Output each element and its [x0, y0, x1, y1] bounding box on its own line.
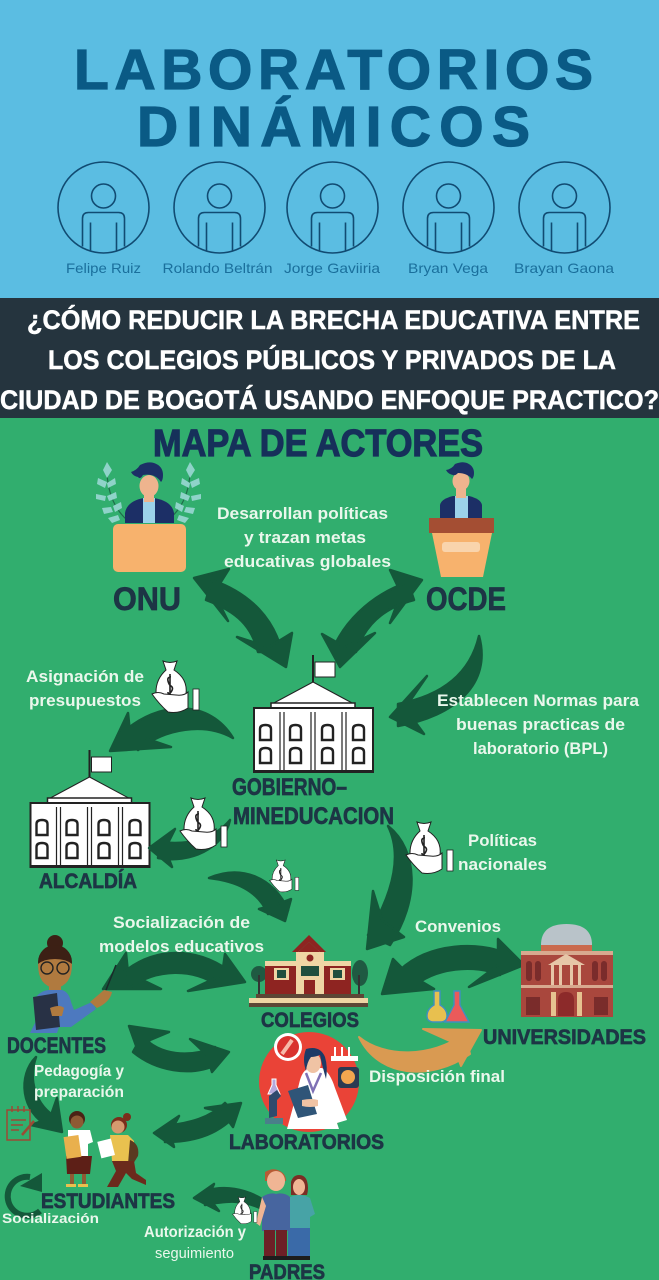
- text: establecen normas: [437, 691, 640, 758]
- member: Brayan Gaona: Brayan Gaona: [514, 260, 614, 276]
- label: OCDE: OCDE: [426, 581, 506, 617]
- text: autorización y seguimiento: seguimiento: [155, 1245, 234, 1262]
- arrow: alcaldía to colegios: [209, 873, 291, 921]
- text: convenios: Convenios: [415, 917, 501, 936]
- member: Jorge Gaviiria: [284, 162, 380, 276]
- text: pedagogía y preparación: preparación: [34, 1084, 124, 1101]
- icon: laboratorio scientist: [259, 1032, 359, 1132]
- icon: building gobierno: [253, 655, 374, 773]
- icon: money bag 5: [233, 1197, 257, 1224]
- label: gobierno mineducacion: [232, 774, 394, 830]
- text: pedagogía y preparación: [34, 1063, 124, 1101]
- arrow: colegios and universidades: [382, 939, 524, 994]
- label: gobierno mineducacion: GOBIERNO–: [232, 774, 347, 801]
- title: DINÁMICOS: [137, 95, 530, 159]
- text: desarrollan políticas: y trazan metas: [244, 528, 366, 547]
- member: Bryan Vega: Bryan Vega: [408, 260, 488, 276]
- text: políticas nacionales: nacionales: [458, 855, 547, 874]
- text: desarrollan políticas: [217, 504, 391, 571]
- text: autorización y seguimiento: Autorización y: [144, 1224, 246, 1241]
- arrow: docentes and colegios: [103, 953, 245, 991]
- member: Bryan Vega: [403, 162, 494, 276]
- icon: money bag 1: [152, 661, 199, 712]
- icon: money bag 3: [270, 860, 299, 892]
- panel: actor map background: [0, 418, 659, 1280]
- question text: [0, 304, 659, 415]
- text: establecen normas: laboratorio (BPL): [473, 739, 608, 758]
- label: universidades: UNIVERSIDADES: [483, 1026, 646, 1049]
- text: desarrollan políticas: Desarrollan políticas: [217, 504, 388, 523]
- text: socialización de modelos: modelos educativos: [99, 937, 264, 956]
- text: asignación de presupuestos: presupuestos: [29, 691, 141, 710]
- member: Brayan Gaona: [514, 162, 614, 276]
- text: socialización: Socialización: [2, 1210, 99, 1226]
- member: Rolando Beltrán: [162, 162, 272, 276]
- text: socialización de modelos: Socialización de: [113, 913, 250, 932]
- icon: cycle arrow: [8, 1173, 42, 1216]
- arrow: mineducación to colegios: [367, 826, 412, 949]
- icon: padres: [256, 1169, 315, 1260]
- icon: colegios building: [249, 935, 368, 1007]
- icon: flasks: [427, 991, 469, 1022]
- text: asignación de presupuestos: Asignación de: [26, 667, 144, 686]
- arrow: gobierno to alcaldía: [110, 708, 233, 751]
- label: alcaldía: ALCALDÍA: [39, 870, 137, 893]
- text: asignación de presupuestos: [26, 667, 144, 710]
- text: políticas nacionales: Políticas: [468, 831, 537, 850]
- label: docentes: DOCENTES: [7, 1033, 106, 1058]
- panel: question band: [0, 298, 659, 418]
- arrow: OCDE to gobierno normas: [390, 636, 482, 734]
- text: socialización de modelos: [99, 913, 264, 956]
- member: Jorge Gaviiria: Jorge Gaviiria: [284, 260, 380, 276]
- text: políticas nacionales: [458, 831, 547, 874]
- text: pedagogía y preparación: Pedagogía y: [34, 1063, 124, 1080]
- text: establecen normas: buenas practicas de: [456, 715, 625, 734]
- arrow: estudiantes and laboratorios: [154, 1103, 241, 1147]
- title: LABORATORIOS: [74, 38, 593, 102]
- label: gobierno mineducacion: MINEDUCACION: [233, 803, 394, 830]
- icon: money bag 2: [180, 798, 227, 850]
- icon: students: [64, 1111, 146, 1187]
- arrow: ONU to gobierno: [194, 569, 292, 667]
- member: Felipe Ruiz: Felipe Ruiz: [66, 260, 141, 276]
- arrow: colegios to universidades disposición: [359, 1029, 481, 1072]
- title: [74, 38, 593, 159]
- label: laboratorios: LABORATORIOS: [229, 1131, 384, 1154]
- actor: OCDE figure: [429, 462, 494, 577]
- icon: universidad: [521, 924, 613, 1017]
- heading: mapa de actores: MAPA DE ACTORES: [153, 423, 483, 465]
- team members: [58, 162, 614, 276]
- actor: ONU figure: [96, 462, 201, 572]
- question text: LOS COLEGIOS PÚBLICOS Y PRIVADOS DE LA: [48, 344, 616, 375]
- icon: money bag 4: [406, 822, 453, 874]
- icon: building alcaldía: [30, 750, 150, 868]
- label: colegios: COLEGIOS: [261, 1009, 359, 1032]
- arrow: mineducación to alcaldía: [149, 820, 230, 867]
- text: disposición final: Disposición final: [369, 1067, 505, 1086]
- label: estudiantes: ESTUDIANTES: [41, 1190, 175, 1213]
- icon: docente: [30, 935, 116, 1033]
- arrow: docentes to estudiantes: [24, 1057, 62, 1132]
- panel: header background: [0, 0, 659, 298]
- member: Rolando Beltrán: Rolando Beltrán: [162, 260, 272, 276]
- icon: notepad: [7, 1106, 34, 1140]
- arrow: OCDE to gobierno: [322, 570, 422, 667]
- text: desarrollan políticas: educativas globales: [224, 552, 391, 571]
- text: establecen normas: Establecen Normas para: [437, 691, 640, 710]
- arrow: padres to estudiantes: [194, 1184, 262, 1211]
- arrow: docentes and laboratorios: [129, 1026, 229, 1072]
- text: autorización y seguimiento: [144, 1224, 246, 1262]
- label: ONU: ONU: [113, 581, 181, 617]
- member: Felipe Ruiz: [58, 162, 149, 276]
